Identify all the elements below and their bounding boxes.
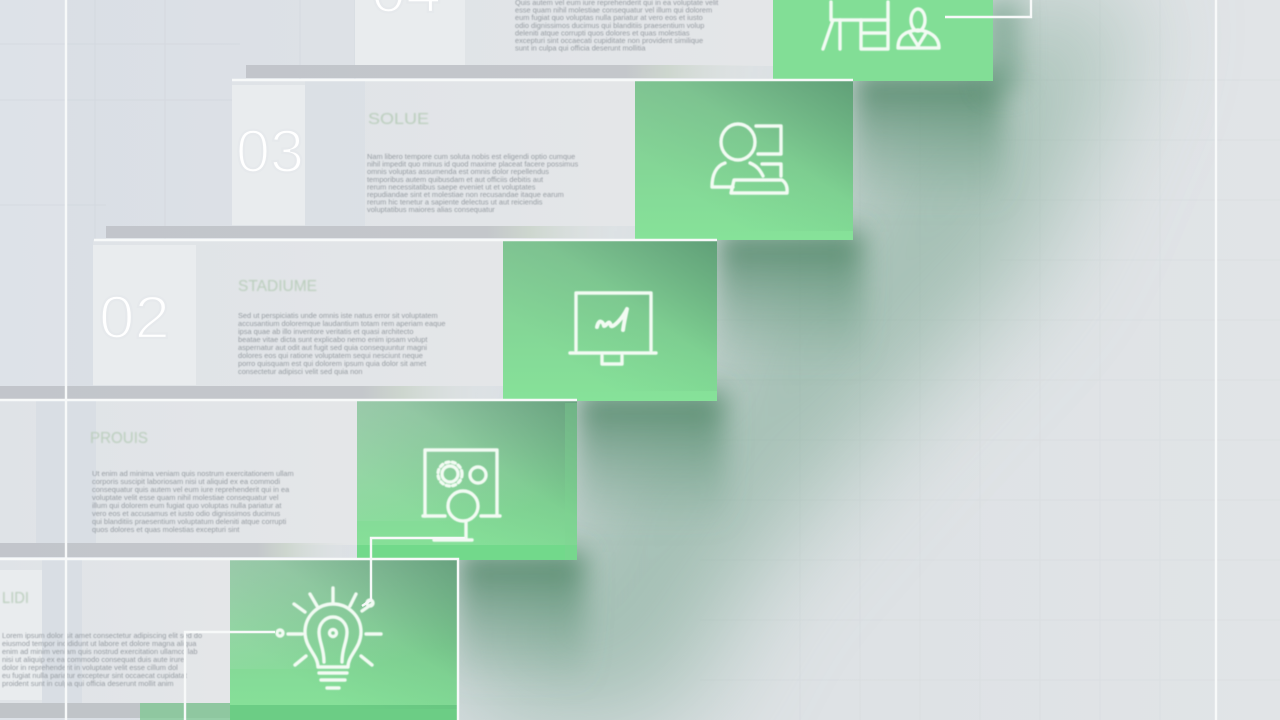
- step 3 title: STADIUME: [238, 278, 317, 295]
- step 2 body text: [92, 469, 294, 534]
- step 1 under bar: [0, 703, 240, 718]
- step 1 body text: eiusmod tempor incididunt ut labore et dolore magna aliqua: [2, 639, 197, 648]
- step 1 body text: enim ad minim veniam quis nostrud exercitation ullamco lab: [2, 647, 198, 656]
- step 2 body text: quos dolores et quas molestias excepturi sint: [92, 525, 239, 534]
- step 4 number: 03: [236, 118, 304, 185]
- icon: person with screen: [712, 124, 787, 193]
- step 1 body text: proident sunt in culpa qui officia deserunt mollit anim: [2, 679, 174, 688]
- step 3 body text: beatae vitae dicta sunt explicabo nemo enim ipsam volupt: [238, 335, 427, 344]
- step 3 body text: dolores eos qui ratione voluptatem sequi nesciunt neque: [238, 351, 423, 360]
- step 3 body text: ipsa quae ab illo inventore veritatis et quasi architecto: [238, 327, 413, 336]
- step 5 body text: esse quam nihil molestiae consequatur vel illum qui dolorem: [515, 6, 712, 15]
- step 4 body text: nihil impedit quo minus id quod maxime placeat facere possimus: [367, 160, 578, 169]
- step 4 green block: [635, 81, 853, 240]
- step 5 body text: excepturi sint occaecati cupiditate non provident similique: [515, 36, 703, 45]
- step 4 under bar: [106, 226, 635, 238]
- step 5 text panel: [355, 0, 773, 66]
- step 3 green block: [503, 241, 717, 401]
- step 1 body text: nisi ut aliquip ex ea commodo consequat duis aute irure: [2, 655, 184, 664]
- step 2 body text: Ut enim ad minima veniam quis nostrum exercitationem ullam: [92, 469, 294, 478]
- step 4 title: SOLUE: [368, 111, 429, 128]
- step 3 body text: porro quisquam est qui dolorem ipsum quia dolor sit amet: [238, 359, 426, 368]
- step 2 body text: vero eos et accusamus et iusto odio dignissimos ducimus: [92, 509, 280, 518]
- step 5 body text: [515, 0, 718, 53]
- step 3 body text: [238, 311, 445, 376]
- step 2 text panel: [0, 401, 357, 545]
- step 2 green block: [357, 401, 577, 560]
- step 3 number: 02: [99, 284, 170, 351]
- step 2 under bar: [0, 543, 357, 557]
- step 4 body text: voluptatibus maiores alias consequatur: [367, 205, 495, 214]
- step 3 under bar: [0, 386, 503, 399]
- step 5 body text: odio dignissimos ducimus qui blanditiis praesentium volup: [515, 21, 704, 30]
- step 2 body text: qui blanditiis praesentium voluptatum deleniti atque corrupti: [92, 517, 287, 526]
- step 1 body text: [2, 631, 202, 688]
- step 2 body text: consequatur quis autem vel eum iure reprehenderit qui in ea: [92, 485, 290, 494]
- step 1 green bleed: [140, 703, 230, 720]
- step 5 body text: eum fugiat quo voluptas nulla pariatur at vero eos et iusto: [515, 13, 703, 22]
- step 3 body text: aspernatur aut odit aut fugit sed quia consequuntur magni: [238, 343, 427, 352]
- step 5 under bar: [246, 65, 773, 78]
- step 3 text panel: [93, 240, 503, 386]
- step 4 text panel: [232, 80, 635, 226]
- step 2: [0, 401, 577, 560]
- step 4: [106, 80, 853, 240]
- step 5 body text: sunt in culpa qui officia deserunt mollitia: [515, 44, 646, 53]
- staircase cast shadow: [458, 0, 1140, 720]
- step 1: [0, 559, 458, 720]
- step 5 body text: deleniti atque corrupti quos dolores et quas molestias: [515, 28, 690, 37]
- icon: light bulb: [277, 588, 381, 688]
- step 5: [246, 0, 993, 81]
- step 4 body text: [367, 152, 578, 214]
- step 1 green block: [230, 559, 458, 720]
- step 1 body text: Lorem ipsum dolor sit amet consectetur adipiscing elit sed do: [2, 631, 202, 640]
- step 5 green block: [773, 0, 993, 81]
- step 4 body text: omnis voluptas assumenda est omnis dolor repellendus: [367, 167, 549, 176]
- icon: monitor with chart: [570, 293, 656, 364]
- step 2 body text: voluptate velit esse quam nihil molestiae consequatur vel: [92, 493, 279, 502]
- step 4 body text: Nam libero tempore cum soluta nobis est eligendi optio cumque: [367, 152, 575, 161]
- step 4 body text: rerum hic tenetur a sapiente delectus ut aut reiciendis: [367, 198, 543, 207]
- step 3 body text: consectetur adipisci velit sed quia non: [238, 367, 362, 376]
- step 1 body text: eu fugiat nulla pariatur excepteur sint occaecat cupidatat: [2, 671, 187, 680]
- step 1 title: LIDI: [2, 590, 29, 607]
- step 1 body text: dolor in reprehenderit in voluptate velit esse cillum dol: [2, 663, 178, 672]
- step 3 body text: accusantium doloremque laudantium totam rem aperiam eaque: [238, 319, 445, 328]
- step 4 body text: temporibus autem quibusdam et aut officiis debitis aut: [367, 175, 543, 184]
- step 2 body text: corporis suscipit laboriosam nisi ut aliquid ex ea commodi: [92, 477, 280, 486]
- step 2 body text: illum qui dolorem eum fugiat quo voluptas nulla pariatur at: [92, 501, 281, 510]
- step 2 title: PROUIS: [90, 430, 148, 447]
- icon: gears and person board: [423, 450, 500, 540]
- step 4 body text: rerum necessitatibus saepe eveniet ut et voluptates: [367, 182, 536, 191]
- step 4 body text: repudiandae sint et molestiae non recusandae itaque earum: [367, 190, 564, 199]
- step 3: [0, 240, 717, 401]
- step 3 body text: Sed ut perspiciatis unde omnis iste natus error sit voluptatem: [238, 311, 438, 320]
- step 1 text panel: [0, 559, 230, 705]
- icon: easel and presenter: [823, 2, 939, 49]
